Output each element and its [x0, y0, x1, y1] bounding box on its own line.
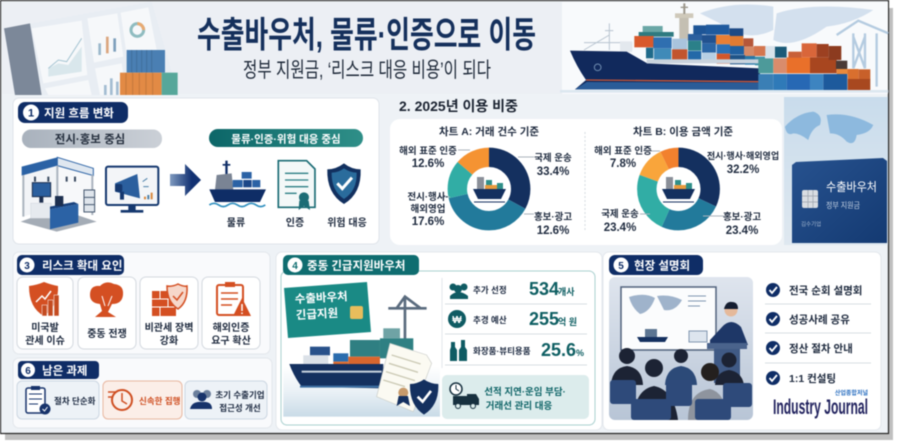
heading 1: 지원 흐름 변화 — [44, 106, 114, 120]
stat: cosmetics and beauty: % — [576, 348, 584, 358]
callout: shipping delay response: 거래선 관리 대응 — [486, 400, 552, 412]
heading 5: 5 — [618, 261, 624, 272]
chart A: by transaction count: 12.6% — [537, 225, 569, 237]
icon: security shield — [327, 163, 361, 204]
chart A: by transaction count: 차트 A: 거래 건수 기준 — [439, 125, 539, 138]
card: improve access: 초기 수출기업 — [215, 390, 265, 400]
list: briefing items: 1:1 컨설팅 — [789, 373, 836, 385]
label: exhibition focus: 전시·홍보 중심 — [55, 132, 125, 146]
title: 수출바우처, 물류·인증으로 이동 — [197, 14, 536, 55]
chart B: by amount: 전시·행사·해외영업 — [707, 150, 779, 161]
heading 4: 중동 긴급지원바우처 — [307, 258, 405, 272]
panel 4: Middle East emergency voucher — [276, 252, 602, 430]
chart B: by amount — [594, 125, 779, 237]
stat: supplementary budget: 추경 예산 — [473, 315, 507, 325]
panel 5: on-site briefing — [603, 252, 881, 430]
stat: cosmetics and beauty — [450, 340, 584, 361]
chart B: by amount: 23.4% — [604, 222, 636, 234]
card: speedy execution: 신속한 집행 — [139, 396, 181, 406]
chart A: by transaction count: 33.4% — [537, 166, 569, 178]
icon: certificate document — [278, 161, 315, 210]
heading 5: 현장 설명회 — [634, 258, 690, 272]
illustration: voucher card over world map: 수출바우처 — [826, 180, 877, 194]
panel 1: support flow change — [13, 98, 379, 244]
chart B: by amount: 해외 표준 인증 — [594, 145, 652, 157]
card: improve access: 접근성 개선 — [219, 403, 261, 413]
illustration: voucher card over world map: 김수기업 — [801, 220, 821, 228]
labels: logistics, certification, risk response: 인증 — [286, 217, 304, 229]
card: overseas certification — [202, 277, 260, 349]
list: briefing items: 전국 순회 설명회 — [789, 284, 862, 297]
heading 1 — [18, 102, 128, 123]
stat: supplementary budget: 억 원 — [558, 316, 577, 327]
panel 3: risk factors — [13, 252, 270, 354]
stat: additional selection — [450, 279, 575, 299]
heading 6 — [18, 361, 99, 379]
chart A: by transaction count: 홍보·광고 — [534, 211, 572, 223]
labels: logistics, certification, risk response — [227, 216, 367, 229]
heading 3 — [17, 255, 124, 275]
chart B: by amount: 32.2% — [727, 164, 759, 176]
stat: cosmetics and beauty: 화장품·뷰티용품 — [473, 346, 531, 356]
illustration: voucher card over world map: 정부 지원금 — [826, 200, 860, 210]
callout: shipping delay response — [442, 375, 589, 419]
chart A: by transaction count: 12.6% — [412, 158, 444, 170]
card: US tariffs: 관세 이슈 — [25, 334, 65, 347]
heading 3: 리스크 확대 요인 — [42, 258, 122, 272]
illustration: voucher card over world map — [784, 97, 888, 245]
card: non-tariff barriers: 비관세 장벽 — [145, 321, 193, 334]
chart A: by transaction count: 해외영업 — [411, 203, 445, 215]
panel 6: remaining tasks — [13, 358, 272, 428]
card: simplify procedure — [17, 381, 99, 419]
card: non-tariff barriers — [140, 277, 198, 349]
heading 6: 6 — [25, 366, 31, 377]
logo: Industry Journal — [773, 389, 868, 419]
illustration: voucher card, ship, document: 수출바우처 — [294, 290, 348, 306]
heading 6: 남은 과제 — [42, 364, 88, 378]
heading 4: 4 — [292, 261, 298, 272]
illustration: voucher card, ship, document — [283, 282, 440, 417]
stat: supplementary budget: 255 — [529, 309, 559, 329]
list: briefing items: 정산 절차 안내 — [789, 342, 853, 355]
card: overseas certification: 요구 확산 — [211, 334, 251, 347]
arrow: flow direction — [170, 164, 201, 196]
icon: small ship — [473, 177, 506, 202]
illustration: cargo ship with containers — [560, 3, 888, 93]
chart A: by transaction count: 전시·행사· — [407, 191, 449, 203]
list: briefing items: 성공사례 공유 — [789, 313, 850, 326]
stat: additional selection: 개사 — [558, 286, 575, 297]
chart B: by amount: 7.8% — [610, 158, 636, 170]
heading 3: 3 — [24, 261, 30, 272]
callout: shipping delay response: 선적 지연·운임 부담· — [484, 386, 566, 398]
panel 2: usage share charts — [390, 119, 782, 245]
section 2 heading: 2. 2025년 이용 비중 — [399, 98, 518, 114]
list: briefing items — [765, 283, 871, 385]
card: simplify procedure: 절차 단순화 — [54, 396, 96, 406]
label: exhibition focus — [22, 130, 162, 148]
icon: monitor with megaphone — [106, 167, 158, 213]
chart B: by amount: 차트 B: 이용 금액 기준 — [633, 125, 733, 138]
chart B: by amount: 국제 운송 — [601, 208, 639, 220]
card: improve access — [185, 381, 267, 419]
stat: supplementary budget: ₩ — [452, 315, 462, 326]
chart A: by transaction count: 국제 운송 — [534, 152, 572, 164]
card: Middle East war: 중동 전쟁 — [87, 328, 127, 340]
illustration: voucher card, ship, document: 긴급지원 — [295, 306, 338, 322]
heading 4 — [283, 255, 419, 275]
heading 1: 1 — [28, 108, 34, 120]
card: US tariffs: 미국발 — [31, 321, 59, 334]
icon: small ship — [662, 177, 695, 202]
card: Middle East war — [78, 277, 136, 349]
stat: additional selection: 534 — [529, 279, 559, 299]
chart A: by transaction count: 17.6% — [412, 216, 444, 228]
label: logistics focus: 물류·인증·위험 대응 중심 — [231, 132, 341, 146]
card: overseas certification: 해외인증 — [213, 321, 249, 334]
stat: supplementary budget — [448, 309, 577, 329]
chart B: by amount: 23.4% — [726, 225, 758, 237]
chart B: by amount: 홍보·광고 — [723, 211, 761, 223]
illustration: briefing room — [609, 277, 753, 420]
label: logistics focus — [209, 129, 363, 147]
card: speedy execution — [103, 381, 182, 419]
illustration: dashboard and containers — [4, 2, 178, 95]
subtitle: 정부 지원금, ‘리스크 대응 비용’이 되다 — [243, 59, 491, 82]
card: non-tariff barriers: 강화 — [160, 334, 178, 347]
stat: cosmetics and beauty: 25.6 — [541, 340, 576, 360]
labels: logistics, certification, risk response: 위험 대응 — [327, 216, 367, 229]
labels: logistics, certification, risk response: 물류 — [227, 217, 245, 229]
chart A: by transaction count — [399, 125, 572, 237]
header band — [2, 2, 888, 94]
heading 5 — [609, 255, 703, 275]
icon: cargo ship — [209, 161, 266, 207]
card: US tariffs — [17, 277, 73, 349]
icon: exhibition booth — [21, 157, 97, 232]
stat: additional selection: 추가 선정 — [473, 285, 507, 295]
logo: Industry Journal: 산업종합저널 — [835, 389, 868, 397]
chart A: by transaction count: 해외 표준 인증 — [399, 145, 457, 157]
